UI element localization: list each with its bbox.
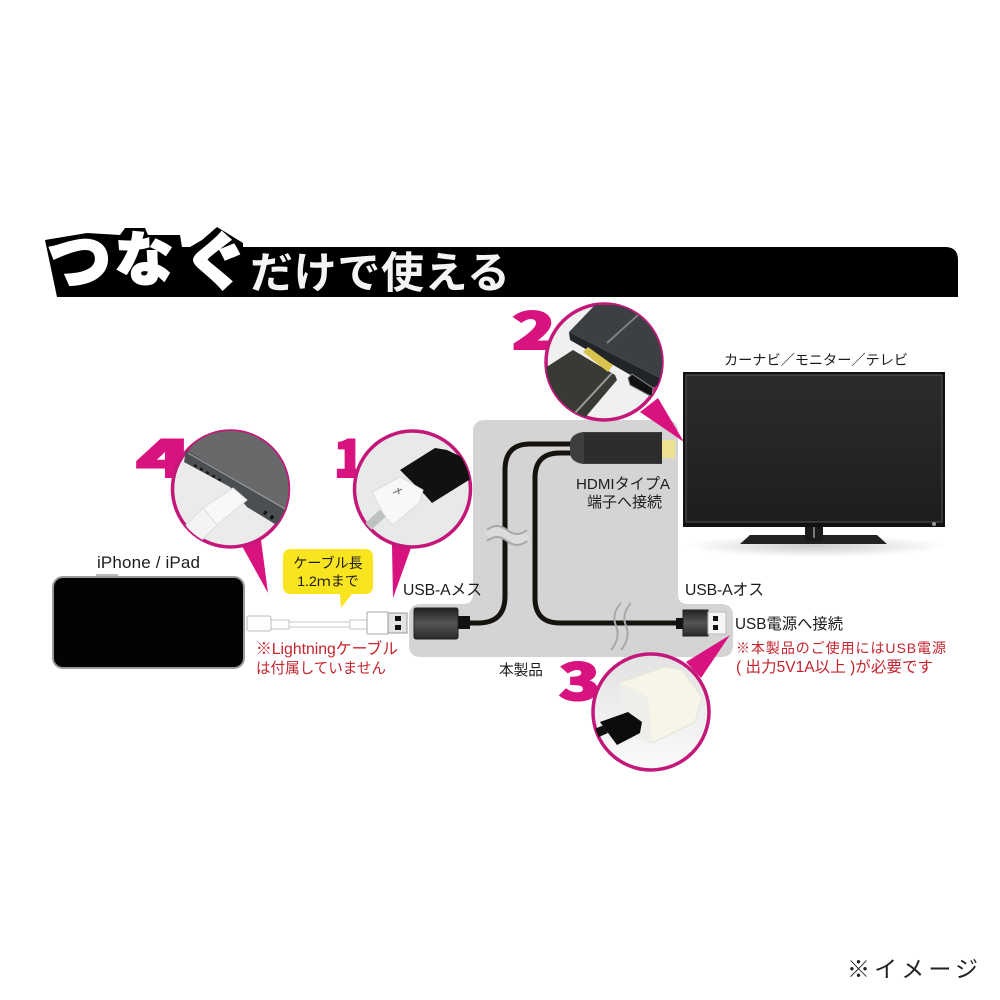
icon: smartphone [52, 574, 245, 669]
product cables [470, 444, 680, 623]
panel: product backdrop [409, 420, 733, 657]
label: this product: 本製品 [499, 662, 543, 679]
lightning cable [247, 612, 407, 634]
note: lightning cable not included [256, 639, 398, 677]
callout: cable length [283, 549, 373, 608]
label: USB-A female: USB-Aメス [403, 582, 482, 599]
label: display devices: カーナビ／モニター／テレビ [724, 353, 908, 369]
title: large word [47, 211, 247, 303]
callout: cable length: 1.2ｍまで [297, 573, 359, 589]
title banner [45, 211, 958, 303]
number 4: 4 [136, 420, 192, 492]
label: HDMI type A [576, 476, 671, 511]
label: USB power: USB電源へ接続 [735, 616, 843, 633]
icon: television [683, 372, 945, 557]
connector: USB-A female [414, 608, 470, 639]
connector: USB-A male [676, 610, 726, 636]
number 3: 3 [559, 643, 600, 715]
number 2: 2 [512, 292, 556, 364]
note: lightning cable not included: ※Lightningケーブル [256, 639, 398, 658]
note: USB power required: ( 出力5V1A以上 )が必要です [736, 658, 933, 676]
connector: HDMI [570, 432, 675, 464]
label: USB-A male: USB-Aオス [685, 582, 764, 599]
note: image only: ※イメージ [847, 956, 978, 982]
callout 1: USB female connection [354, 431, 472, 598]
title: large word: ぐ [185, 212, 247, 302]
title: large word: つ [47, 211, 111, 303]
callout: cable length: ケーブル長 [293, 555, 363, 571]
number 1: 1 [334, 420, 364, 492]
label: HDMI type A: HDMIタイプA [576, 476, 671, 493]
title: small words: だけで使える [250, 239, 510, 301]
title: large word: な [115, 213, 173, 297]
note: USB power required [736, 640, 946, 676]
callout 3: USB power connection [592, 635, 730, 770]
label: HDMI type A: 端子へ接続 [587, 494, 662, 511]
cable break marks [487, 526, 631, 650]
note: lightning cable not included: は付属していません [256, 660, 386, 677]
callout 4: iPhone connection [172, 428, 295, 593]
label: device: iPhone / iPad [97, 553, 200, 572]
note: USB power required: ※本製品のご使用にはUSB電源 [736, 640, 946, 656]
callout 2: HDMI connection [545, 304, 684, 442]
